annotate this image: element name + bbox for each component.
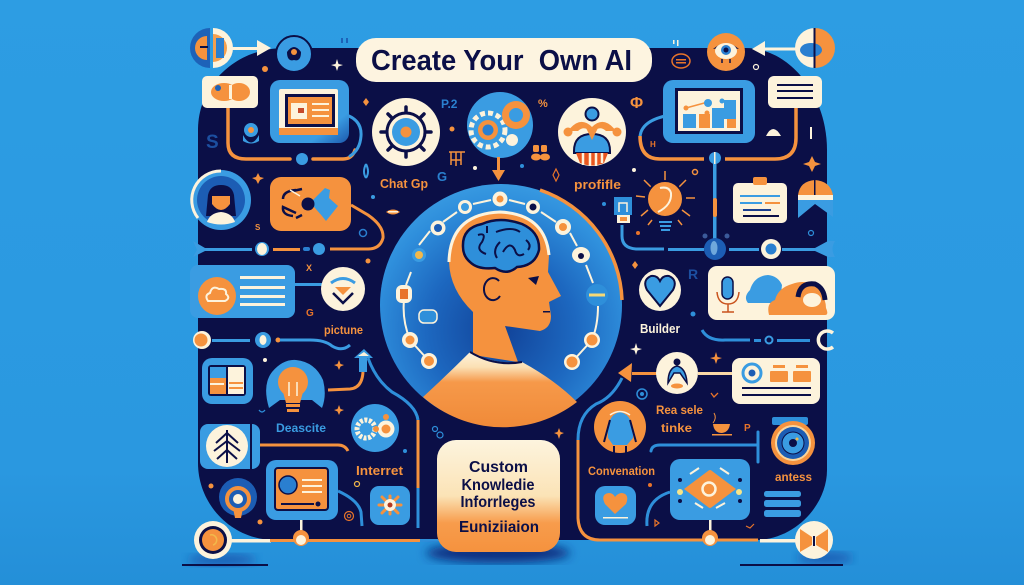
label: phi: Φ bbox=[630, 95, 643, 112]
card: orange tool bbox=[270, 177, 351, 231]
label: Convenation: Convenation bbox=[588, 464, 655, 478]
connector: vertical hub line bbox=[702, 152, 730, 260]
label: Deascite: Deascite bbox=[276, 421, 326, 435]
card: top-right lines bbox=[768, 76, 822, 108]
ring of nodes bbox=[396, 192, 608, 370]
connector: bottom rail right bbox=[702, 520, 796, 546]
connector: blue/orange vertical line center-left bbox=[368, 358, 418, 528]
shadow under knowledge card bbox=[426, 543, 570, 563]
connector: right blue/orange line bbox=[578, 378, 758, 540]
label: Rea sele: Rea sele bbox=[656, 403, 703, 417]
head bbox=[449, 212, 561, 362]
icon: avatar woman bbox=[191, 170, 251, 230]
label: tinke: tinke bbox=[661, 421, 692, 435]
arrow: from card through badge bbox=[618, 363, 732, 382]
connector: top-right orange loop bbox=[640, 108, 796, 159]
icon: top-left round badge bbox=[276, 36, 312, 72]
title pill bbox=[356, 38, 652, 82]
label: profifle: profifle bbox=[574, 178, 621, 192]
panel: custom knowledge card bbox=[437, 440, 560, 552]
icon: heart square bbox=[595, 486, 636, 525]
card: orange screen lower-left bbox=[266, 460, 338, 520]
card: top-left cream toggle bbox=[202, 76, 258, 108]
label: R: R bbox=[688, 266, 698, 282]
label: P.2: P.2 bbox=[441, 97, 458, 111]
icon: gear circle bbox=[372, 98, 440, 166]
label: G orange: G bbox=[306, 308, 314, 319]
connector: bottom rail left bbox=[225, 520, 438, 546]
card: mic and clouds bbox=[708, 266, 835, 320]
connector: blue curve from lower-left screen bbox=[338, 491, 362, 526]
orange star left bbox=[252, 173, 264, 184]
icon: eye badge bbox=[707, 33, 745, 71]
arrow: down from gears bbox=[492, 157, 505, 181]
label: s: S bbox=[255, 223, 261, 232]
icon: USB plug bbox=[614, 197, 632, 223]
shadow and line bottom-left bbox=[182, 554, 268, 566]
label: Builder: Builder bbox=[640, 322, 680, 336]
label: antess: antess bbox=[775, 470, 812, 484]
brain bbox=[463, 220, 539, 272]
connector: to chevron badge bbox=[295, 283, 325, 286]
connector: curve to eye panel bbox=[647, 492, 670, 526]
card: schedule note bbox=[733, 177, 787, 223]
card: chips and lines bbox=[732, 358, 820, 404]
icon: two gears circle bbox=[351, 404, 399, 452]
icon: monitor top-left bbox=[270, 80, 349, 143]
card: book bbox=[202, 358, 253, 404]
icon: keyhole bulb bbox=[219, 478, 257, 518]
connector: picture rail bbox=[193, 331, 350, 349]
arrow: up from bulb to picture bbox=[328, 349, 373, 390]
icon: person network circle bbox=[558, 98, 626, 166]
label: Chat Gp: Chat Gp bbox=[380, 177, 428, 191]
center figure bbox=[380, 184, 622, 427]
small marks under orange card bbox=[360, 230, 370, 264]
icon: stacked bars bbox=[764, 491, 801, 517]
icon: chart monitor bbox=[663, 80, 755, 143]
top-right half circle icon bbox=[795, 28, 835, 68]
icon: gears circle top center bbox=[467, 92, 533, 158]
panel: custom knowledge card: Knowledie bbox=[462, 477, 535, 494]
label: x: X bbox=[306, 263, 312, 273]
panel: blue cloud card bbox=[190, 265, 295, 318]
connector: line from orange card bbox=[330, 205, 383, 249]
icon: clover bbox=[531, 145, 550, 160]
panel: custom knowledge card: Euniziiaion bbox=[459, 519, 539, 536]
shirt bbox=[423, 352, 577, 427]
label: Interret: Interret bbox=[356, 464, 404, 478]
icon: small blue blob and S bbox=[206, 123, 259, 153]
label: P: P bbox=[744, 423, 751, 434]
icon: radial square bbox=[370, 486, 410, 525]
dark rounded panel bbox=[198, 48, 827, 540]
card: tree bbox=[200, 424, 260, 469]
icon: light bulb in arch bbox=[266, 360, 325, 412]
top-left half circle icon bbox=[190, 28, 233, 68]
facial details bbox=[484, 278, 500, 300]
icon: bottom-left badge bbox=[194, 521, 232, 559]
connector: top-left orange loop bbox=[228, 108, 361, 165]
marks near Builder bbox=[554, 312, 722, 487]
connector: builder rail bbox=[702, 330, 833, 349]
icon: heart badge bbox=[639, 269, 681, 311]
connector: left horizontal rail bbox=[193, 241, 325, 257]
panel: custom knowledge card: Inforrleges bbox=[460, 494, 536, 511]
arrow: top-right connector bbox=[752, 41, 796, 56]
icon: coffee cup bbox=[712, 413, 732, 436]
connector: right horizontal rail bbox=[622, 225, 835, 259]
connector: T line bbox=[651, 432, 758, 462]
label: percent: % bbox=[538, 98, 548, 110]
icon: figure badge bbox=[656, 352, 698, 394]
arrow: top-left connector bbox=[229, 40, 271, 56]
card: eye panel bbox=[670, 459, 750, 520]
icon: light bulb with rays bbox=[636, 171, 695, 231]
label: H: H bbox=[650, 140, 656, 149]
icon: small blue blob and S: S bbox=[206, 132, 219, 153]
shadow and line bottom-right bbox=[740, 552, 853, 566]
small marks bottom right bbox=[655, 520, 754, 528]
decorative sparkles top-left bbox=[262, 38, 369, 106]
decorative marks top right bbox=[520, 40, 821, 269]
small glyph marks by gear bbox=[364, 126, 477, 214]
icon: chevron badge bbox=[321, 267, 365, 311]
panel: custom knowledge card: Custom bbox=[469, 459, 528, 476]
icon: bottom-right bowtie badge bbox=[795, 521, 833, 559]
icon: pentagon flag bbox=[798, 180, 833, 218]
decorative stars lower-left bbox=[208, 358, 443, 524]
title pill: Create Your Own AI bbox=[371, 45, 632, 77]
icon: person in orange circle bbox=[594, 401, 646, 458]
label: pictune: pictune bbox=[324, 323, 363, 337]
icon: target bbox=[771, 417, 815, 465]
connector: tree to gears bbox=[260, 445, 348, 451]
label: G: G bbox=[437, 169, 447, 184]
